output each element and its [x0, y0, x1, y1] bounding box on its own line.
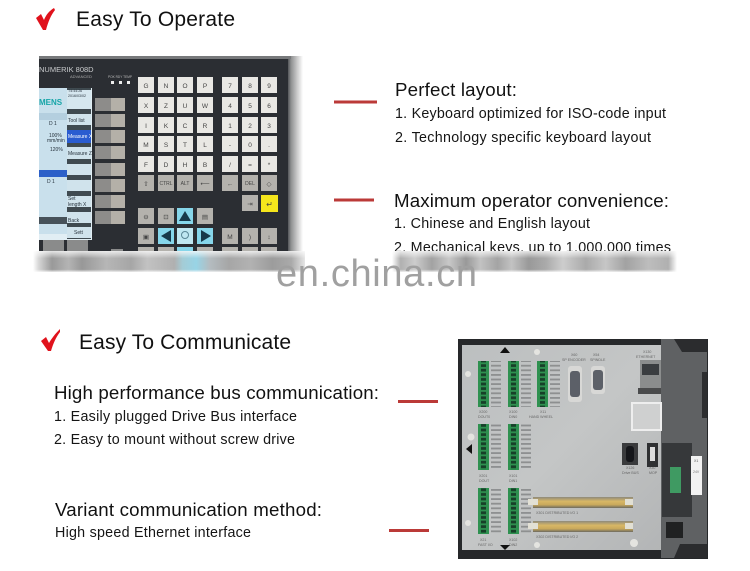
- terminal labels: X201: [479, 474, 487, 478]
- key legends: 8: [248, 83, 252, 90]
- soft keys: Sett: [74, 230, 84, 236]
- text block: variant communication method: [55, 499, 322, 541]
- icon: red check mark operate: [36, 8, 55, 30]
- D-sub connector X54: [591, 366, 605, 394]
- D-sub connector X60: [568, 366, 582, 402]
- panel body: [39, 56, 288, 252]
- function key legends: ⟵: [200, 181, 210, 188]
- text block: high performance bus communication: 2. Easy to mount without screw drive: [54, 432, 295, 448]
- terminal labels: X102: [509, 538, 517, 542]
- keyboard panel photo: [39, 56, 303, 253]
- mounting screws: [465, 349, 638, 548]
- function key legends: ⊡: [163, 214, 169, 221]
- function key legends: ⇧: [143, 180, 149, 188]
- function key legends: [143, 180, 272, 241]
- screen: D 1: [49, 121, 57, 127]
- title: Easy To Operate: Easy To Operate: [76, 8, 235, 31]
- panel brand text: NUMERIK 808D: [39, 65, 94, 74]
- MOP USB port: [647, 443, 658, 467]
- text block: maximum operator convenience: [394, 190, 671, 256]
- text block: perfect layout: Perfect layout:: [395, 79, 517, 100]
- key legends: W: [202, 103, 209, 110]
- text block: high performance bus communication: High performance bus communication:: [54, 382, 379, 403]
- text block: maximum operator convenience: 2. Mechanical keys, up to 1,000,000 times: [394, 240, 671, 256]
- right side housing: [661, 339, 707, 558]
- alignment arrows: [466, 347, 510, 550]
- terminal labels: DOUT: [479, 479, 490, 483]
- text block: variant communication method: High speed Ethernet interface: [55, 525, 251, 541]
- soft keys: [67, 88, 93, 239]
- key legends: =: [248, 162, 252, 169]
- key legends: U: [183, 103, 188, 110]
- key legends: -: [229, 142, 231, 149]
- text block: perfect layout: 1. Keyboard optimized for ISO-code input: [395, 106, 666, 122]
- text block: high performance bus communication: [54, 382, 379, 448]
- terminal screw pattern: [481, 361, 545, 534]
- key legends: 2: [248, 123, 252, 130]
- terminal labels: DIN2: [509, 543, 517, 547]
- watermark: en.china.cn: [276, 253, 477, 295]
- outer frame: [458, 339, 708, 559]
- key legends: X: [144, 103, 149, 110]
- key legends: 4: [228, 103, 232, 110]
- side softkey rows: [95, 98, 125, 224]
- terminal labels: DIN1: [509, 479, 517, 483]
- terminal labels: X30: [649, 466, 655, 470]
- function key legends: ↕: [267, 234, 271, 241]
- keyboard panel photo: ADVANCED: [70, 74, 92, 79]
- screen: 120%: [50, 147, 63, 153]
- terminal labels: SP ENCODER: [562, 358, 586, 362]
- terminal labels: X21: [480, 538, 486, 542]
- function key legends: ⇥: [247, 201, 253, 208]
- key legends: 9: [267, 83, 271, 90]
- status lamps: [108, 75, 132, 84]
- key legends: 5: [248, 103, 252, 110]
- terminal pin legends: [491, 361, 560, 534]
- soft keys: Measure Z: [68, 151, 92, 157]
- ethernet port: [638, 360, 661, 394]
- reflection band under keyboard photo: [33, 251, 305, 272]
- key legends: 3: [267, 123, 271, 130]
- connector line 1: [334, 100, 377, 104]
- key legends: C: [183, 123, 188, 130]
- metal plate: [462, 345, 661, 550]
- key legends: [143, 83, 271, 169]
- text block: high performance bus communication: 1. Easily plugged Drive Bus interface: [54, 409, 297, 425]
- cyan navigation keys: [158, 208, 213, 253]
- terminal labels: HAND WHEEL: [529, 415, 553, 419]
- power connector and label: [670, 456, 702, 495]
- green terminal blocks: [478, 361, 548, 534]
- icon: red check mark communicate: [41, 329, 60, 351]
- terminal labels: X200: [479, 410, 487, 414]
- connector line 4: [389, 529, 429, 532]
- soft keys: 2016/03/02: [68, 94, 86, 98]
- function key legends: M: [227, 234, 233, 241]
- terminal labels: Drive BUS: [622, 471, 639, 475]
- bottom screen buttons: [43, 240, 123, 253]
- soft keys: length X: [68, 202, 87, 208]
- text block: variant communication method: Variant communication method:: [55, 499, 322, 520]
- key legends: B: [203, 162, 207, 169]
- yellow input key: [261, 195, 278, 212]
- terminal labels: X302 DISTRIBUTED I/O 2: [536, 535, 578, 539]
- panel right edge shading: [288, 56, 303, 252]
- screen: [39, 88, 93, 240]
- key legends: 6: [267, 103, 271, 110]
- terminal labels: DOUT0: [478, 415, 490, 419]
- drive bus port: [622, 443, 638, 465]
- terminal labels: X60: [571, 353, 577, 357]
- text block: perfect layout: [395, 79, 666, 146]
- key legends: H: [183, 162, 188, 169]
- key legends: F: [144, 162, 148, 169]
- key legends: P: [203, 83, 207, 90]
- key legends: D: [164, 162, 169, 169]
- grey function keys: [138, 175, 277, 253]
- function key legends: ⊖: [143, 214, 149, 221]
- key legends: S: [164, 142, 169, 149]
- controller rear panel photo: [458, 339, 708, 559]
- terminal labels: DIN0: [509, 415, 517, 419]
- key legends: /: [229, 162, 231, 169]
- reflection band under text: [392, 251, 677, 272]
- terminal labels: X100: [509, 410, 517, 414]
- text block: maximum operator convenience: Maximum operator convenience:: [394, 190, 669, 211]
- key legends: R: [203, 123, 208, 130]
- connector line 3: [398, 400, 438, 403]
- key legends: K: [164, 123, 169, 130]
- terminal labels: X101: [509, 474, 517, 478]
- soft keys: Measure X: [68, 134, 93, 140]
- function key legends: ←: [227, 181, 233, 188]
- soft keys: Set: [68, 196, 76, 202]
- terminal labels: MOP: [649, 471, 658, 475]
- status lamps: POK RDY TEMP: [108, 75, 132, 79]
- key legends: O: [182, 83, 188, 90]
- title: Easy To Communicate: Easy To Communicate: [79, 331, 291, 354]
- text block: maximum operator convenience: 1. Chinese and English layout: [394, 216, 590, 232]
- key legends: T: [183, 142, 187, 149]
- terminal labels: ETHERNET: [636, 355, 656, 359]
- key legends: 0: [248, 142, 252, 149]
- screen: MENS: [39, 98, 63, 107]
- key legends: Z: [164, 103, 168, 110]
- connector line 2: [334, 198, 374, 202]
- key legends: N: [164, 83, 169, 90]
- key legends: .: [268, 142, 270, 149]
- terminal labels: FAST I/O: [478, 543, 493, 547]
- function key legends: CTRL: [159, 181, 173, 187]
- function key legends: ▤: [202, 214, 208, 221]
- key legends: L: [203, 142, 207, 149]
- terminal labels: X54: [593, 353, 599, 357]
- key legends: M: [143, 142, 149, 149]
- screen: 100%: [49, 133, 62, 139]
- terminal labels: X126: [626, 466, 634, 470]
- distributed I/O connectors: [528, 497, 633, 532]
- key legends: I: [145, 123, 147, 130]
- white letter and number keys: [138, 77, 277, 172]
- key legends: 1: [228, 123, 232, 130]
- function key legends: ◇: [266, 181, 272, 188]
- text block: perfect layout: 2. Technology specific keyboard layout: [395, 130, 651, 146]
- soft keys: T4:44:26: [68, 89, 82, 93]
- soft keys: Back: [68, 218, 80, 224]
- screen: D 1: [47, 179, 55, 185]
- terminal labels: [478, 350, 658, 547]
- key legends: G: [143, 83, 149, 90]
- function key legends: ): [249, 234, 251, 241]
- soft keys: Tool list: [68, 118, 85, 124]
- screen: mm/min: [47, 138, 65, 144]
- function key legends: ▣: [143, 234, 149, 241]
- function key legends: ALT: [181, 181, 189, 187]
- terminal labels: X130: [643, 350, 651, 354]
- terminal labels: X11: [540, 410, 546, 414]
- power connector and label: X1: [694, 459, 698, 463]
- power connector and label: 24V: [693, 470, 700, 474]
- key legends: 7: [228, 83, 232, 90]
- terminal labels: SPINDLE: [590, 358, 606, 362]
- blank label area: [632, 403, 661, 430]
- terminal labels: X301 DISTRIBUTED I/O 1: [536, 511, 578, 515]
- key legends: *: [268, 162, 271, 169]
- yellow input key: ↵: [266, 200, 273, 209]
- function key legends: DEL: [245, 181, 255, 187]
